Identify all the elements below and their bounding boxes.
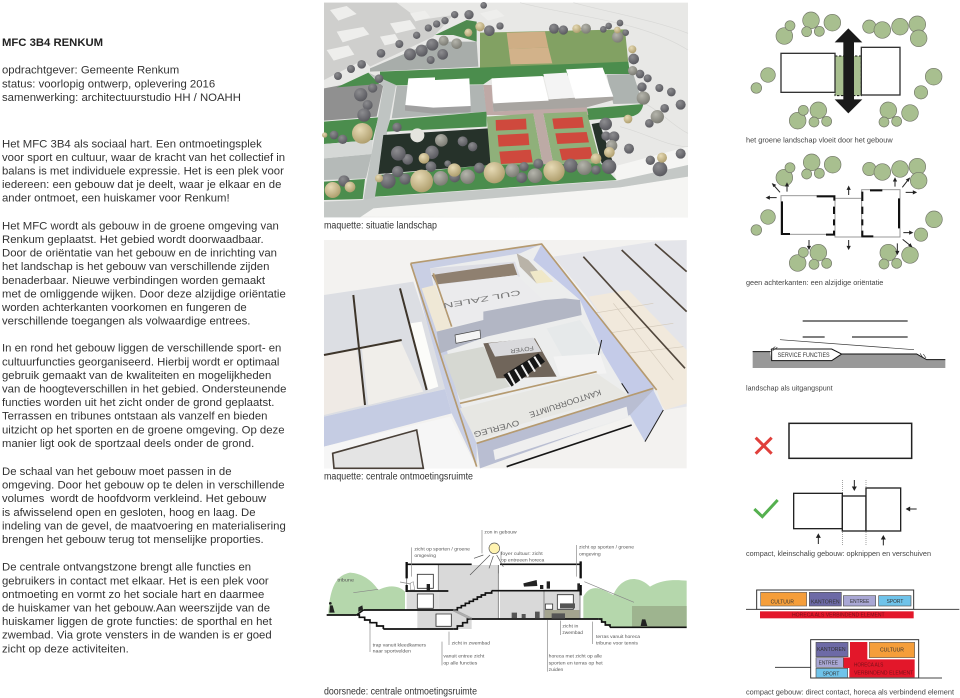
annotations: vanuit entree zicht — [443, 654, 485, 660]
text block: schaal: omgeving. Door het gebouw op te delen in verschillende — [2, 480, 285, 492]
elongated programme: CULTUUR — [771, 599, 794, 605]
large single volume — [789, 423, 912, 458]
text block: sport- en cultuurfuncties: uitzicht op het sporten en de groene omgeving. Op deze — [2, 424, 285, 436]
service functions: SERVICE FUNCTIES — [778, 353, 830, 359]
caption: compact gebouw: direct contact, horeca als verbindend element — [746, 688, 954, 697]
stacked programme: SPORT — [823, 671, 840, 677]
text block: centrale ontvangstzone: zicht op deze activiteiten. — [2, 643, 129, 655]
annotations: zon in gebouw — [484, 530, 517, 536]
annotations: omgeving — [579, 551, 601, 557]
annotations: zicht in zwembad — [452, 641, 490, 647]
arrows: outward — [767, 178, 916, 254]
annotations: trap vanuit kleedkamers — [373, 643, 427, 649]
text block: sociaal hart — [2, 138, 285, 205]
text block: groene omgeving — [1, 220, 286, 328]
text block: groene omgeving: Door de oriëntatie van het gebouw en de inrichting van — [2, 248, 277, 260]
annotations: zwembad — [562, 630, 583, 636]
building interior — [407, 565, 580, 629]
project details — [2, 65, 241, 104]
text block: centrale ontvangstzone: huiskamer liggen de grote functies: de sporthal en het — [2, 616, 273, 628]
arrow: through route — [835, 28, 862, 113]
annotations: zicht op sporten / groene — [414, 547, 470, 553]
text block: sociaal hart: ander ontmoet, een huiskamer voor Renkum! — [2, 193, 230, 205]
diagram: groene landschap — [746, 12, 942, 145]
text block: sport- en cultuurfuncties: In en rond het gebouw liggen de verschillende sport- en — [2, 343, 281, 355]
text block: sport- en cultuurfuncties: functies worden uit het zicht onder de grond geplaatst. — [2, 397, 274, 409]
text block: sociaal hart: voor sport en cultuur, waar de kracht van het collectief in — [2, 152, 285, 164]
caption: het groene landschap vloeit door het gebouw — [746, 136, 893, 145]
text block: centrale ontvangstzone: ontmoeting en vormt zo het sociale hart en daarmee — [2, 589, 264, 601]
stacked programme: KANTOREN — [817, 647, 846, 653]
annotations: tribune — [337, 578, 354, 584]
caption: centrale ontmoetingsruimte: maquette: centrale ontmoetingsruimte — [324, 472, 473, 482]
photo: interior model: CUL ZALEN — [443, 288, 521, 310]
title: MFC 3B4 RENKUM — [2, 37, 103, 49]
diagram: landschap als uitgangspunt — [746, 321, 945, 558]
annotations: op entreeen horeca — [501, 557, 545, 563]
text block: centrale ontvangstzone — [2, 562, 273, 655]
text block: schaal — [2, 466, 286, 546]
caption: doorsnede: doorsnede: centrale ontmoetingsruimte — [324, 686, 477, 698]
text block: schaal: volumes wordt de hoofdvorm verkleind. Het gebouw — [2, 493, 267, 505]
icon: red cross — [756, 438, 772, 454]
caption: landschap als uitgangspunt — [746, 384, 833, 393]
annotations: zicht in — [562, 623, 579, 629]
text block: groene omgeving: met de omliggende wijken. Door deze alzijdige oriëntatie — [2, 288, 286, 300]
annotations: op alle functies — [443, 660, 478, 666]
annotations: terras vanuit horeca — [596, 634, 640, 640]
text block: centrale ontvangstzone: gebruikers in contact met elkaar. Het is een plek voor — [2, 575, 269, 587]
text block: groene omgeving: worden achterkanten voorkomen en fungeren de — [1, 302, 247, 314]
text block: groene omgeving: benaderbaar. Nieuwe verbindingen worden gemaakt — [2, 275, 266, 287]
split volumes — [794, 480, 917, 545]
text block: groene omgeving: Het MFC wordt als gebouw in de groene omgeving van — [2, 220, 279, 232]
text block: centrale ontvangstzone: zwembad. Via grote vensters in de wanden is er goed — [2, 630, 272, 642]
annotations: horeca met zicht op alle — [549, 654, 602, 660]
elongated programme: HORECA ALS VERBINDEND ELEMENT — [792, 613, 885, 619]
photo: interior model — [324, 240, 687, 468]
text block: groene omgeving: Renkum geplaatst. Het gebied wordt doorwaadbaar. — [2, 234, 264, 246]
project details: status: voorlopig ontwerp, oplevering 2016 — [2, 78, 215, 90]
caption: situatie landschap: maquette: situatie landschap — [324, 220, 437, 232]
leader lines — [353, 530, 634, 672]
text block: centrale ontvangstzone: De centrale ontvangstzone brengt alle functies en — [2, 562, 251, 574]
text block: schaal: is afwisselend open en gesloten, hoog en laag. De — [2, 507, 256, 519]
elongated programme: SPORT — [887, 599, 904, 605]
caption: geen achterkanten: een alzijdige oriëntatie — [746, 278, 883, 287]
stacked programme: HORECA ALS — [854, 663, 884, 669]
caption: compact, kleinschalig gebouw: opknippen en verschuiven — [746, 549, 931, 558]
photo: site model — [322, 2, 688, 217]
text block: schaal: brengen het gebouw terug tot menselijke proporties. — [2, 534, 264, 546]
stacked programme: CULTUUR — [880, 648, 904, 654]
text block: sociaal hart: Het MFC 3B4 als sociaal hart. Een ontmoetingsplek — [2, 138, 262, 150]
text block: sport- en cultuurfuncties: cultuurfuncties georganiseerd. Hierbij wordt er optimaal — [2, 356, 279, 368]
trees — [751, 12, 942, 129]
annotations: sporten en terras op het — [549, 660, 603, 666]
icon: green check — [754, 500, 778, 517]
text block: sport- en cultuurfuncties: van de hoogteverschillen in het gebied. Ondersteunende — [2, 384, 286, 396]
photo: interior model: OVERLEG — [473, 418, 520, 439]
text block: sociaal hart: iedereen: een gebouw dat je deelt, waar je elkaar en de — [2, 179, 281, 191]
elongated programme: ENTREE — [850, 599, 870, 605]
elongated programme: KANTOREN — [811, 599, 840, 605]
text block: schaal: De schaal van het gebouw moet passen in de — [2, 466, 232, 478]
annotations: omgeving — [414, 553, 436, 559]
text block: sport- en cultuurfuncties: gebruik gemaakt van de kwaliteiten en mogelijkheden — [2, 370, 271, 382]
text block: sport- en cultuurfuncties: manier ligt ook de sportzaal deels onder de grond. — [2, 438, 254, 450]
stacked programme: ENTREE — [819, 660, 838, 666]
ground section — [753, 352, 945, 368]
photo: interior model: KANTOORRUIMTE — [528, 387, 602, 420]
elongated programme — [746, 590, 959, 619]
annotations: zuiden — [549, 667, 564, 673]
buildings — [781, 47, 900, 96]
text block: sport- en cultuurfuncties: Terrassen en tribunes ontstaan als vanzelf en bieden — [2, 411, 268, 423]
sun — [470, 543, 503, 575]
section drawing — [327, 530, 687, 673]
annotations: naar sportvelden — [373, 649, 411, 655]
text block: centrale ontvangstzone: de huiskamer van het gebouw.Aan weerszijde van de — [2, 602, 270, 614]
stacked programme: VERBINDEND ELEMENT — [854, 671, 914, 677]
entrance bars — [782, 190, 899, 236]
trees — [751, 154, 942, 271]
annotations: zicht op sporten / groene — [579, 545, 634, 551]
annotations: tribune voor tennis — [596, 640, 639, 646]
annotations — [337, 530, 640, 673]
landscape greenery — [328, 573, 687, 627]
service functions — [772, 349, 842, 361]
diagram: compact gebouw — [746, 590, 959, 697]
diagram: alzijdige orientatie — [746, 154, 942, 287]
people and furniture — [329, 580, 647, 626]
text block: sociaal hart: balans is met individuele expressie. Het is een plek voor — [2, 166, 284, 178]
project details: opdrachtgever: Gemeente Renkum — [2, 65, 179, 77]
text block: groene omgeving: het landschap is het gebouw van verschillende zijden — [2, 261, 269, 273]
text block: sport- en cultuurfuncties — [2, 343, 286, 450]
building outlines — [781, 190, 900, 237]
text block: schaal: indeling van de gevel, de maatvoering en materialisering — [2, 520, 286, 532]
annotations: foyer cultuur: zicht — [501, 551, 543, 557]
photo: interior model: FOYER — [509, 344, 534, 353]
structure lines — [327, 564, 687, 629]
stacked programme — [775, 640, 942, 678]
floor lines — [803, 321, 908, 337]
text block: groene omgeving: verschillende toegangen als volwaardige entrees. — [2, 316, 250, 328]
project details: samenwerking: architectuurstudio HH / NOAHH — [2, 92, 241, 104]
